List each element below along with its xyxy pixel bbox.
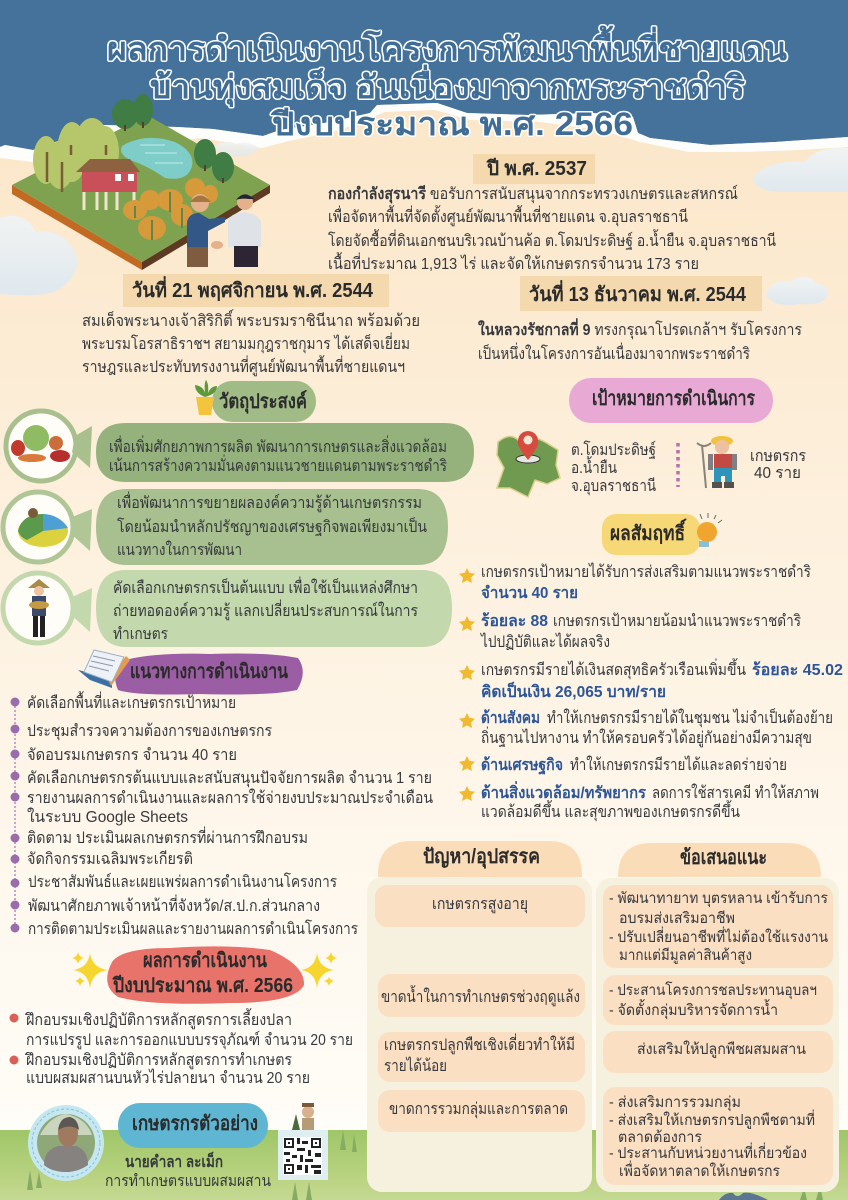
panel: problems <box>367 841 592 1192</box>
panel: recommendations: - ปรับเปลี่ยนอาชีพที่ไม่ต้องใช้แรงงาน <box>609 926 828 946</box>
text block: royal project <box>478 318 802 363</box>
title: บ้านทุ่งสมเด็จ อันเนื่องมาจากพระราชดำริ <box>150 64 745 108</box>
heading: 21 November 2544 <box>123 274 389 307</box>
clouds <box>0 142 848 305</box>
list: outcomes: ทำให้เกษตรกรมีรายได้และลดร่ายจ่าย <box>570 755 787 774</box>
text block: royal project: เป็นหนึ่งในโครงการอันเนื่องมาจากพระราชดำริ <box>478 342 750 363</box>
text block: royal project: ในหลวงรัชกาลที่ 9 ทรงกรุณาโปรดเกล้าฯ รับโครงการ <box>478 318 802 340</box>
heading: results 2566 <box>72 946 337 1004</box>
panel: recommendations: อบรมส่งเสริมอาชีพ <box>619 910 735 927</box>
photo: model farmer <box>28 1105 104 1181</box>
heading: results 2566: ผลการดำเนินงาน <box>143 950 267 972</box>
heading: year 2537 <box>473 154 595 184</box>
objective 3: คัดเลือกเกษตรกรเป็นต้นแบบ เพื่อใช้เป็นแหล่งศึกษา <box>113 576 418 597</box>
panel: recommendations: - ส่งเสริมให้เกษตรกรปลูกพืชตามที่ <box>609 1109 815 1129</box>
list: implementation steps: คัดเลือกพื้นที่และเกษตรกรเป้าหมาย <box>27 691 236 712</box>
panel: recommendations: - พัฒนาทายาท บุตรหลาน เข้ารับการ <box>609 890 828 908</box>
list: outcomes: เกษตรกรเป้าหมายน้อมนำแนวพระราชดำริ <box>553 612 801 630</box>
title: ปีงบประมาณ พ.ศ. 2566 <box>270 106 633 142</box>
icon: map with pin <box>497 431 560 497</box>
list: implementation steps: ในระบบ Google Sheets <box>27 807 188 826</box>
objective 3 <box>3 570 452 647</box>
heading: 13 December 2544 <box>520 276 762 311</box>
icon: small farmer <box>292 1103 314 1130</box>
heading: 21 November 2544: วันที่ 21 พฤศจิกายน พ.ศ. 2544 <box>132 275 374 302</box>
list: outcomes <box>459 562 843 822</box>
panel: problems: เกษตรกรสูงอายุ <box>432 896 528 914</box>
list: outcomes: ไปปฏิบัติและได้ผลจริง <box>479 632 610 651</box>
panel: recommendations <box>596 843 839 1192</box>
list: outcomes: ร้อยละ 45.02 <box>752 661 843 679</box>
list: implementation steps: รายงานผลการดำเนินงานและผลการใช้จ่ายงบประมาณประจำเดือน <box>27 788 433 807</box>
objective 3: ทำเกษตร <box>113 626 168 643</box>
panel: recommendations: - จัดตั้งกลุ่มบริหารจัดการน้ำ <box>609 999 778 1020</box>
icon: mixed farming plot <box>3 492 92 562</box>
heading: outcomes <box>602 513 722 555</box>
title: ผลการดำเนินงานโครงการพัฒนาพื้นที่ชายแดน <box>107 25 787 67</box>
icon: sparkles right <box>301 952 337 988</box>
list: outcomes: จำนวน 40 ราย <box>481 584 578 602</box>
list: implementation steps: ประชุมสำรวจความต้องการของเกษตรกร <box>27 722 272 741</box>
text block: royal visit: ราษฎรและประทับทรงงานที่ศูนย์พัฒนาพื้นที่ชายแดนฯ <box>82 355 405 377</box>
text block: royal visit <box>82 309 420 377</box>
list: 2566 training <box>10 1008 353 1087</box>
list: 2566 training: ฝึกอบรมเชิงปฏิบัติการหลักสูตรการทำเกษตร <box>25 1052 292 1070</box>
list: implementation steps: จัดอบรมเกษตรกร จำนวน 40 ราย <box>27 747 237 764</box>
heading: problems: ปัญหา/อุปสรรค <box>423 846 540 869</box>
text block: farmer name <box>105 1150 271 1190</box>
list: implementation steps: การติดตามประเมินผลและรายงานผลการดำเนินโครงการ <box>28 919 358 938</box>
icon: sparkles left <box>72 952 108 988</box>
objective 2 <box>3 489 448 565</box>
text block: royal visit: สมเด็จพระนางเจ้าสิริกิติ์ พระบรมราชินีนาถ พร้อมด้วย <box>82 309 420 330</box>
heading: outcomes: ผลสัมฤทธิ์ <box>610 518 687 545</box>
text block: target location <box>571 440 656 496</box>
list: implementation steps <box>10 691 433 938</box>
icon: documents <box>78 650 130 688</box>
objective 2: โดยน้อมนำหลักปรัชญาของเศรษฐกิจพอเพียงมาเป็น <box>117 516 427 536</box>
text block: 2537: กองกำลังสุรนารี ขอรับการสนับสนุนจากกระทรวงเกษตรและสหกรณ์ <box>328 184 738 204</box>
heading: targets: เป้าหมายการดำเนินการ <box>592 387 755 410</box>
list: implementation steps: คัดเลือกเกษตรกรต้นแบบและสนับสนุนปัจจัยการผลิต จำนวน 1 ราย <box>27 769 432 788</box>
objective 3: ถ่ายทอดองค์ความรู้ แลกเปลี่ยนประสบการณ์ในการ <box>113 599 418 621</box>
text block: 2537: โดยจัดซื้อที่ดินเอกชนบริเวณบ้านค้อ ต.โดมประดิษฐ์ อ.น้ำยืน จ.อุบลราชธานี <box>328 229 776 251</box>
panel: recommendations: - ประสานกับหน่วยงานที่เกี่ยวข้อง <box>609 1142 807 1162</box>
text block: farmer name: นายคำลา ละเม็ก <box>125 1150 223 1171</box>
icon: model farmer <box>3 573 92 643</box>
list: implementation steps: ประชาสัมพันธ์และเผยแพร่ผลการดำเนินงานโครงการ <box>28 872 337 891</box>
panel: problems: ขาดการรวมกลุ่มและการตลาด <box>389 1101 568 1119</box>
text block: 2537: เนื้อที่ประมาณ 1,913 ไร่ และจัดให้เกษตรกรจำนวน 173 ราย <box>328 252 699 273</box>
text block: target farmers <box>750 448 806 482</box>
heading: model farmer <box>118 1103 268 1148</box>
icon: vegetables <box>6 411 92 481</box>
panel: recommendations: - ประสานโครงการชลประทานอุบลฯ <box>609 981 817 1000</box>
list: 2566 training: แบบผสมผสานบนหัวไร่ปลายนา จำนวน 20 ราย <box>26 1068 310 1087</box>
list: outcomes: คิดเป็นเงิน 26,065 บาท/ราย <box>481 680 666 701</box>
heading: results 2566: ปีงบประมาณ พ.ศ. 2566 <box>112 974 293 997</box>
text block: target location: ต.โดมประดิษฐ์ <box>571 440 656 459</box>
list: implementation steps: พัฒนาศักยภาพเจ้าหน้าที่จังหวัด/ส.ป.ก.ส่วนกลาง <box>28 894 320 915</box>
objective 1 <box>6 411 474 482</box>
icon: farmer with fork <box>697 436 737 488</box>
panel: recommendations: ส่งเสริมให้ปลูกพืชผสมผสาน <box>637 1040 806 1058</box>
list: outcomes: ร้อยละ 88 <box>481 612 548 630</box>
text block: royal visit: พระบรมโอรสาธิราชฯ สยามมกุฎราชกุมาร ได้เสด็จเยี่ยม <box>82 332 410 354</box>
list: 2566 training: ฝึกอบรมเชิงปฏิบัติการหลักสูตรการเลี้ยงปลา <box>25 1008 292 1030</box>
list: 2566 training: การแปรรูป และการออกแบบบรรจุภัณฑ์ จำนวน 20 ราย <box>26 1030 353 1050</box>
list: implementation steps: ติดตาม ประเมินผลเกษตรกรที่ผ่านการฝึกอบรม <box>27 826 308 847</box>
text block: target farmers: 40 ราย <box>754 465 801 482</box>
QR code <box>278 1130 328 1180</box>
list: outcomes: เกษตรกรมีรายได้เงินสดสุทธิครัวเรือนเพิ่มขึ้น <box>481 658 746 680</box>
objective 2: เพื่อพัฒนาการขยายผลองค์ความรู้ด้านเกษตรกรรม <box>117 491 422 513</box>
objective 1: เพื่อเพิ่มศักยภาพการผลิต พัฒนาการเกษตรและสิ่งแวดล้อม <box>109 435 447 456</box>
objective 1: เน้นการสร้างความมั่นคงตามแนวชายแดนตามพระราชดำริ <box>109 454 447 475</box>
panel: problems: เกษตรกรปลูกพืชเชิงเดี่ยวทำให้มี <box>384 1033 575 1055</box>
heading: objectives: วัตถุประสงค์ <box>219 390 307 414</box>
illustration: farm land and handshake <box>12 94 270 270</box>
text block: target farmers: เกษตรกร <box>750 448 806 465</box>
panel: recommendations: มากแต่มีมูลค่าสินค้าสูง <box>619 947 752 964</box>
panel: problems: รายได้น้อย <box>384 1056 447 1075</box>
list: outcomes: ด้านเศรษฐกิจ <box>481 756 563 775</box>
text block: 2537 <box>328 184 776 273</box>
heading: year 2537: ปี พ.ศ. 2537 <box>486 157 587 180</box>
list: implementation steps: จัดกิจกรรมเฉลิมพระเกียรติ <box>27 850 193 868</box>
text block: farmer name: การทำเกษตรแบบผสมผสาน <box>105 1173 271 1190</box>
icon: light bulb <box>697 513 722 547</box>
heading: 13 December 2544: วันที่ 13 ธันวาคม พ.ศ. 2544 <box>529 279 747 306</box>
text block: target location: อ.น้ำยืน <box>571 456 617 477</box>
heading: objectives <box>195 380 316 422</box>
panel: recommendations: เพื่อจัดหาตลาดให้เกษตรกร <box>619 1160 780 1180</box>
panel: recommendations: - ส่งเสริมการรวมกลุ่ม <box>609 1094 741 1112</box>
objective 2: แนวทางในการพัฒนา <box>117 540 242 559</box>
heading: model farmer: เกษตรกรตัวอย่าง <box>132 1113 258 1135</box>
list: outcomes: แวดล้อมดีขึ้น และสุขภาพของเกษตรกรดีขึ้น <box>481 800 740 822</box>
panel: recommendations: ตลาดต้องการ <box>618 1129 702 1146</box>
heading: targets <box>569 378 773 423</box>
divider dots <box>676 443 680 487</box>
title <box>107 25 787 142</box>
heading: implementation guidelines <box>78 650 303 694</box>
list: outcomes: ด้านสังคม <box>481 709 540 727</box>
text block: target location: จ.อุบลราชธานี <box>571 477 656 496</box>
list: outcomes: ด้านสิ่งแวดล้อม/ทรัพยากร <box>481 781 646 802</box>
panel: problems: ขาดน้ำในการทำเกษตรช่วงฤดูแล้ง <box>381 985 580 1007</box>
heading: implementation guidelines: แนวทางการดำเนินงาน <box>130 661 288 683</box>
text block: 2537: เพื่อจัดหาพื้นที่จัดตั้งศูนย์พัฒนาพื้นที่ชายแดน จ.อุบลราชธานี <box>328 205 688 227</box>
heading: recommendations: ข้อเสนอแนะ <box>680 846 767 869</box>
